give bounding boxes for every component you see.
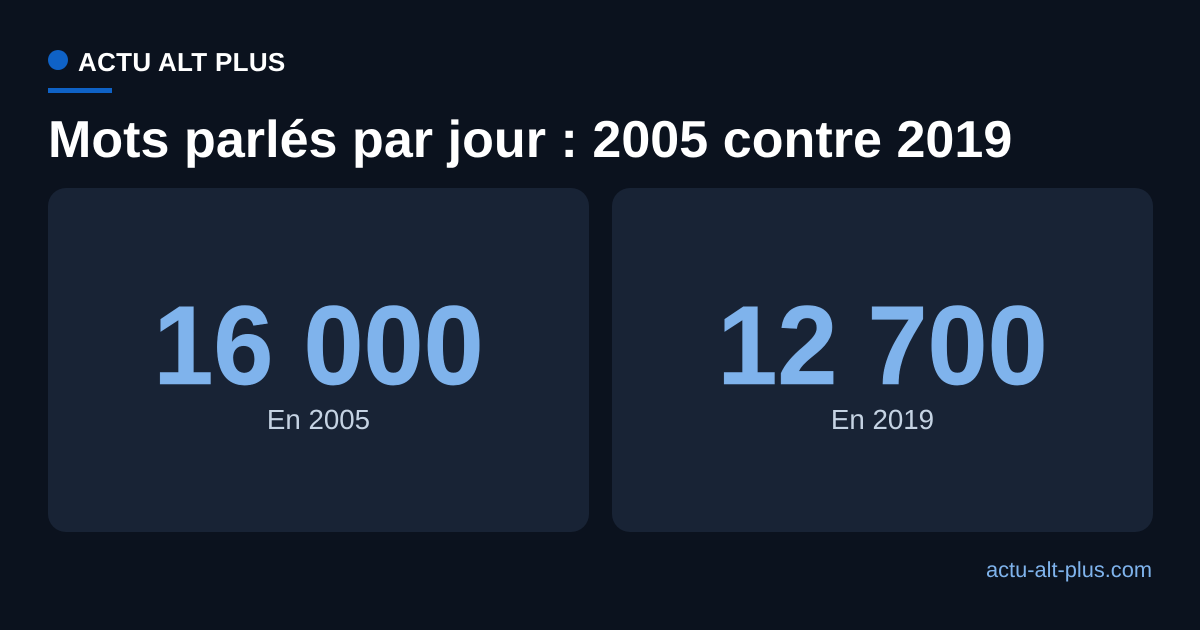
value: 2019: 12 700 <box>717 282 1048 408</box>
icon: brand dot <box>48 50 68 70</box>
panel: 2019 <box>612 188 1153 532</box>
brand underline <box>48 88 112 93</box>
label: 2019: En 2019 <box>831 404 934 435</box>
source link: actu-alt-plus.com <box>986 557 1152 582</box>
panel: 2005 <box>48 188 589 532</box>
brand header <box>48 47 286 93</box>
label: 2005: En 2005 <box>267 404 370 435</box>
value: 2005: 16 000 <box>153 282 484 408</box>
title: Mots parlés par jour : 2005 contre 2019 <box>48 111 1012 169</box>
brand name: ACTU ALT PLUS <box>78 47 286 77</box>
